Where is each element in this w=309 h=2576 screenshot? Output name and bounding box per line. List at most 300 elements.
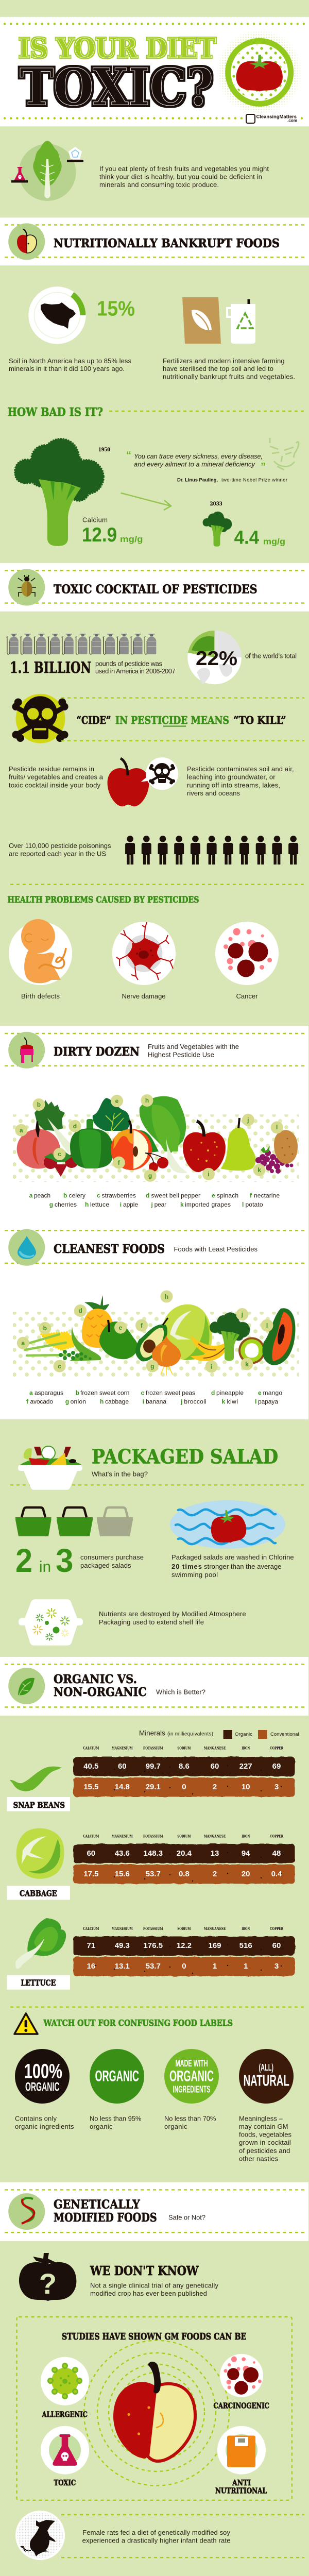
legend: cleanest foods: j bbox=[180, 1398, 182, 1405]
table: snap beans: COPPER bbox=[270, 1745, 283, 1751]
letter badges: b bbox=[37, 1101, 41, 1108]
stat: 2 in 3: 2 bbox=[15, 1542, 32, 1579]
title: is your diet: IS YOUR DIET bbox=[19, 33, 216, 64]
text: pesticide contaminates bbox=[187, 765, 294, 797]
table: lettuce: SODIUM bbox=[177, 1926, 191, 1931]
legend: cleanest foods: k bbox=[221, 1398, 226, 1405]
section header: cleanest foods bbox=[5, 1229, 304, 1266]
text: nutrients: Nutrients are destroyed by Modified Atmosphere bbox=[99, 1610, 246, 1618]
heading: cide means to kill: “TO KILL” bbox=[233, 714, 286, 726]
text: nutrients bbox=[99, 1610, 246, 1626]
table: cabbage: SODIUM bbox=[177, 1834, 191, 1838]
badge: made with organic ingredients: ORGANIC bbox=[169, 2068, 214, 2085]
title: toxic: TOXIC? bbox=[20, 58, 213, 117]
letter badges bbox=[17, 1290, 273, 1372]
table: lettuce: CALCIUM bbox=[83, 1926, 99, 1931]
heading: DIRTY DOZEN bbox=[54, 1044, 140, 1059]
badge: all natural bbox=[239, 2049, 294, 2104]
legend: minerals bbox=[139, 1729, 299, 1739]
logo: cleansingmatters: CleansingMatters bbox=[256, 114, 297, 120]
legend: dirty dozen: d bbox=[146, 1192, 149, 1199]
legend: minerals: Minerals bbox=[139, 1729, 165, 1737]
legend: dirty dozen: g bbox=[49, 1201, 53, 1208]
banana bbox=[191, 1335, 229, 1361]
legend: cleanest foods: pineapple bbox=[216, 1389, 244, 1396]
text: chlorine bbox=[171, 1553, 294, 1579]
label: ANTI bbox=[232, 2479, 251, 2487]
arrow bbox=[121, 493, 171, 510]
panel: birth defects bbox=[9, 919, 72, 1000]
table: cabbage: MANGANESE bbox=[204, 1834, 226, 1838]
icon: fertilizer bag and mug bbox=[182, 297, 255, 344]
subtitle: Safe or Not? bbox=[168, 2214, 205, 2222]
text: contains only bbox=[15, 2114, 74, 2130]
table: snap beans: 10 bbox=[242, 1783, 250, 1791]
peas bbox=[59, 1350, 92, 1361]
table: snap beans: 14.8 bbox=[115, 1783, 130, 1791]
label: 2033: 2033 bbox=[210, 501, 222, 507]
table: snap beans bbox=[73, 1745, 295, 1797]
legend: cleanest foods: banana bbox=[146, 1398, 166, 1405]
logo: cleansingmatters: .com bbox=[287, 118, 297, 123]
table: lettuce: 49.3 bbox=[115, 1941, 130, 1950]
heading: we don't know: WE DON'T KNOW bbox=[90, 2263, 199, 2278]
icon: cabbage bbox=[16, 1828, 64, 1879]
text: no less than 95: organic bbox=[90, 2123, 113, 2130]
icon: skull on yellow bbox=[12, 694, 68, 743]
label: cabbage bbox=[7, 1886, 70, 1900]
badge: 100 percent organic: 100% bbox=[24, 2060, 62, 2083]
table: cabbage: MAGNESIUM bbox=[112, 1834, 133, 1838]
heading: how bad is it: HOW BAD IS IT? bbox=[7, 406, 103, 419]
table: cabbage: 13 bbox=[211, 1849, 219, 1858]
letter badges bbox=[15, 1094, 283, 1182]
legend: dirty dozen: celery bbox=[69, 1192, 85, 1199]
table: cabbage: IRON bbox=[242, 1834, 250, 1838]
legend: cleanest foods: h bbox=[100, 1398, 104, 1405]
legend: cleanest foods: b bbox=[76, 1389, 79, 1396]
onion bbox=[152, 1335, 181, 1376]
stat: 1.1 billion bbox=[10, 659, 176, 677]
badge: made with organic ingredients bbox=[164, 2049, 219, 2104]
heading: studies: STUDIES HAVE SHOWN GM FOODS CAN BE bbox=[62, 2331, 246, 2342]
icon: snap bean bbox=[10, 1767, 62, 1791]
legend: dirty dozen: a bbox=[29, 1192, 33, 1199]
legend: dirty dozen: j bbox=[150, 1201, 153, 1208]
table: snap beans: 3 bbox=[274, 1783, 279, 1791]
legend: minerals: Conventional bbox=[270, 1732, 299, 1737]
grapes bbox=[255, 1146, 294, 1174]
icon: half gm apple bbox=[113, 2362, 195, 2461]
table: cabbage: 20 bbox=[242, 1870, 250, 1878]
text: fertilizers: have sterilised the top soil and led to bbox=[163, 365, 273, 372]
letter badges: f bbox=[118, 1159, 121, 1166]
subtitle bbox=[148, 1043, 239, 1058]
table: lettuce: 1 bbox=[244, 1962, 248, 1971]
table: lettuce bbox=[73, 1926, 295, 1976]
panel: nutritionally bankrupt foods bbox=[0, 217, 309, 266]
legend: cleanest foods: kiwi bbox=[227, 1398, 238, 1405]
text: meaningless: of pesticides and bbox=[239, 2147, 290, 2155]
text: meaningless: may contain GM bbox=[239, 2123, 288, 2130]
table: lettuce: 3 bbox=[274, 1962, 279, 1971]
table: snap beans: 0 bbox=[182, 1783, 186, 1791]
text: meaningless: foods, vegetables bbox=[239, 2131, 291, 2139]
label: Cancer bbox=[236, 992, 258, 1000]
legend: dirty dozen: peach bbox=[34, 1192, 50, 1199]
text: pesticide contaminates: Pesticide contaminates soil and air, bbox=[187, 765, 294, 773]
legend: dirty dozen: lettuce bbox=[90, 1201, 109, 1208]
broccoli bbox=[210, 1313, 250, 1361]
legend: dirty dozen: k bbox=[180, 1201, 184, 1208]
legend: cleanest foods: frozen sweet peas bbox=[146, 1389, 195, 1396]
heading: MODIFIED FOODS bbox=[54, 2210, 157, 2225]
table: snap beans: 40.5 bbox=[83, 1762, 98, 1771]
stat: calcium 2033 bbox=[234, 527, 285, 548]
text: intro: think your diet is healthy, but you could be deficient in bbox=[99, 173, 262, 180]
stat: 15 percent: 15% bbox=[97, 297, 135, 320]
table: lettuce: COPPER bbox=[270, 1926, 283, 1931]
text: meaningless bbox=[239, 2114, 291, 2162]
legend: dirty dozen: sweet bell pepper bbox=[151, 1192, 200, 1199]
legend: dirty dozen: f bbox=[250, 1192, 252, 1199]
text: pesticide residue: toxic cocktail inside your body bbox=[9, 781, 101, 789]
letter badges: i bbox=[211, 1363, 212, 1370]
text: soil minerals bbox=[9, 357, 132, 372]
table: snap beans: 69 bbox=[272, 1762, 281, 1771]
label: snap beans: SNAP BEANS bbox=[13, 1800, 65, 1810]
logo: cleansingmatters bbox=[246, 114, 297, 123]
heading: TOXIC COCKTAIL OF PESTICIDES bbox=[54, 582, 258, 596]
text: no less than 95 bbox=[90, 2114, 142, 2130]
quote: linus pauling: “ bbox=[126, 450, 131, 461]
legend: cleanest foods: onion bbox=[71, 1398, 86, 1405]
table: lettuce: 0 bbox=[182, 1962, 186, 1971]
heading: cide means to kill bbox=[76, 714, 286, 726]
corn bbox=[41, 1327, 101, 1361]
table: cabbage: 2 bbox=[213, 1870, 217, 1878]
table: lettuce: 169 bbox=[208, 1941, 221, 1950]
subtitle: What's in the bag? bbox=[92, 1470, 148, 1478]
bell pepper bbox=[70, 1119, 113, 1168]
stat: calcium 2033: mg/g bbox=[263, 537, 285, 547]
letter badges: k bbox=[245, 1361, 249, 1368]
legend: cleanest foods: cabbage bbox=[105, 1398, 129, 1405]
letter badges: h bbox=[145, 1097, 149, 1104]
label: CARCINOGENIC bbox=[213, 2402, 269, 2410]
letter badges: g bbox=[150, 1363, 154, 1370]
badge: organic: ORGANIC bbox=[95, 2068, 139, 2085]
text: pesticide contaminates: running off into streams, lakes, bbox=[187, 781, 280, 789]
label: NUTRITIONAL bbox=[215, 2486, 267, 2495]
icon: carcinogenic bbox=[213, 2354, 269, 2410]
cabbage bbox=[162, 1304, 212, 1360]
text: contains only: organic ingredients bbox=[15, 2123, 74, 2130]
label: snap beans bbox=[7, 1797, 70, 1811]
text: no less than 95: No less than 95% bbox=[90, 2114, 142, 2123]
text: poisonings bbox=[9, 842, 111, 857]
letter badges: c bbox=[58, 1150, 61, 1158]
stat: 2 in 3: packaged salads bbox=[80, 1562, 131, 1569]
icon: pauling face bbox=[270, 438, 299, 470]
text: female rats: Female rats fed a diet of genetically modified soy bbox=[82, 2529, 231, 2536]
text: contains only: Contains only bbox=[15, 2114, 57, 2123]
legend: dirty dozen: l bbox=[242, 1201, 244, 1208]
legend: minerals: (in milliequivalents) bbox=[167, 1731, 213, 1737]
subtitle: Foods with Least Pesticides bbox=[174, 1245, 258, 1253]
panel: cancer bbox=[215, 922, 279, 1000]
text: meaningless: grown in cocktail bbox=[239, 2139, 291, 2146]
heading: confusing food labels: WATCH OUT FOR CONFUSING FOOD LABELS bbox=[43, 2019, 233, 2029]
icon: small broccoli 2033 bbox=[203, 512, 232, 547]
text: pesticide residue: Pesticide residue remains in bbox=[9, 765, 94, 773]
legend: dirty dozen: nectarine bbox=[254, 1192, 280, 1199]
quote: linus pauling: Dr. Linus Pauling, bbox=[177, 478, 218, 483]
heading bbox=[54, 2197, 157, 2225]
table: cabbage: 94 bbox=[242, 1849, 250, 1858]
letter badges: l bbox=[266, 1322, 268, 1329]
text: clinical trial: modified crop has ever been published bbox=[90, 2290, 207, 2297]
heading: packaged salad: PACKAGED SALAD bbox=[92, 1445, 278, 1468]
legend: dirty dozen: e bbox=[212, 1192, 215, 1199]
table: cabbage: 0.4 bbox=[271, 1870, 282, 1878]
apple bbox=[183, 1121, 226, 1172]
text: pesticide residue bbox=[9, 765, 104, 789]
letter badges: f bbox=[141, 1322, 143, 1329]
icon: anti nutritional scale bbox=[215, 2426, 267, 2495]
icon: tomato in ring bbox=[216, 29, 303, 115]
papaya bbox=[262, 1308, 295, 1365]
stat: 2 in 3: in bbox=[39, 1558, 51, 1575]
table: lettuce: 53.7 bbox=[146, 1962, 161, 1971]
quote: linus pauling bbox=[126, 450, 287, 483]
heading: cide means to kill: “CIDE” bbox=[76, 714, 111, 726]
heading: cide means to kill: IN PESTICIDE MEANS bbox=[115, 714, 229, 726]
icon: beetle bbox=[8, 569, 45, 606]
legend: cleanest foods: l bbox=[255, 1398, 256, 1405]
text: intro bbox=[99, 165, 269, 189]
stat: calcium 1950 bbox=[82, 516, 143, 546]
text: intro: minerals and consuming toxic produce. bbox=[99, 181, 219, 189]
quote: linus pauling: ” bbox=[261, 461, 266, 472]
table: snap beans: 227 bbox=[239, 1762, 252, 1771]
heading: NON-ORGANIC bbox=[54, 1685, 147, 1699]
text: pesticide contaminates: rivers and oceans bbox=[187, 789, 240, 797]
label: ALLERGENIC bbox=[42, 2410, 88, 2419]
icon row: baskets 2 of 3 bbox=[15, 1507, 133, 1536]
label: cabbage: CABBAGE bbox=[20, 1888, 57, 1898]
table: cabbage: COPPER bbox=[270, 1834, 283, 1838]
table: cabbage: POTASSIUM bbox=[143, 1834, 163, 1838]
legend: dirty dozen: i bbox=[120, 1201, 122, 1208]
heading: health problems: HEALTH PROBLEMS CAUSED BY PESTICIDES bbox=[7, 895, 199, 905]
text: meaningless: other nasties bbox=[239, 2155, 278, 2162]
icon: rat bbox=[15, 2511, 65, 2560]
badge: made with organic ingredients: INGREDIENTS bbox=[173, 2084, 210, 2095]
letter badges: d bbox=[73, 1123, 77, 1130]
stat: calcium 2033: 4.4 bbox=[234, 527, 259, 548]
icon: leaf bbox=[8, 1668, 45, 1704]
table: snap beans: POTASSIUM bbox=[143, 1745, 163, 1751]
text: soil minerals: minerals in it than it did 100 years ago. bbox=[9, 365, 125, 372]
table: snap beans: 2 bbox=[213, 1783, 217, 1791]
icon: black tomato question bbox=[19, 2253, 76, 2301]
table: lettuce: MANGANESE bbox=[204, 1926, 226, 1931]
icon: lettuce bbox=[15, 1918, 66, 1969]
text: pesticide residue: fruits/ vegetables and creates a bbox=[9, 773, 104, 781]
legend: dirty dozen: cherries bbox=[55, 1201, 77, 1208]
badge: 100 percent organic: ORGANIC bbox=[25, 2080, 60, 2094]
table: lettuce: 516 bbox=[239, 1941, 252, 1950]
letter badges: d bbox=[78, 1307, 82, 1314]
table: snap beans: 8.6 bbox=[179, 1762, 190, 1771]
legend: cleanest foods: papaya bbox=[258, 1398, 278, 1405]
panel: nerve damage bbox=[112, 922, 176, 1000]
label: Nerve damage bbox=[122, 992, 166, 1000]
letter badges: c bbox=[58, 1363, 61, 1370]
legend: cleanest foods: c bbox=[141, 1389, 145, 1396]
table: lettuce: 16 bbox=[87, 1962, 95, 1971]
table: cabbage: 17.5 bbox=[83, 1870, 98, 1878]
text: fertilizers: nutritionally bankrupt fruits and vegetables. bbox=[163, 373, 295, 381]
letter badges: a bbox=[20, 1127, 23, 1134]
icon: dna bbox=[8, 2193, 45, 2230]
legend: cleanest foods: avocado bbox=[30, 1398, 53, 1405]
text: world total: of the world's total bbox=[245, 652, 297, 659]
legend: cleanest foods: i bbox=[143, 1398, 144, 1405]
chart: globe 22 percent bbox=[187, 631, 242, 685]
cherries bbox=[145, 1153, 168, 1172]
table: cabbage: 15.6 bbox=[115, 1870, 130, 1878]
heading: GENETICALLY bbox=[54, 2197, 141, 2211]
legend: cleanest foods: g bbox=[65, 1398, 69, 1405]
table: lettuce: MAGNESIUM bbox=[112, 1926, 133, 1931]
table: cabbage: 53.7 bbox=[146, 1870, 161, 1878]
text: poisonings: are reported each year in the US bbox=[9, 850, 106, 857]
stat: 1.1 billion: pounds of pesticide was bbox=[95, 659, 163, 668]
table: lettuce: IRON bbox=[242, 1926, 250, 1931]
panel: white produce section bbox=[0, 1026, 308, 1419]
letter badges: h bbox=[165, 1293, 168, 1300]
stat: 1.1 billion: 1.1 BILLION bbox=[10, 659, 91, 677]
table: snap beans: 60 bbox=[211, 1762, 219, 1771]
illustration: cleanest foods bbox=[13, 1290, 299, 1379]
nectarine bbox=[111, 1121, 152, 1170]
letter badges: g bbox=[148, 1172, 152, 1179]
stat: 1.1 billion: used in America in 2006-2007 bbox=[95, 667, 176, 675]
potato bbox=[274, 1130, 298, 1164]
letter badges: e bbox=[119, 1324, 123, 1331]
table: lettuce: 60 bbox=[272, 1941, 281, 1950]
spinach bbox=[93, 1098, 130, 1131]
legend: dirty dozen: b bbox=[63, 1192, 67, 1199]
table: snap beans: MAGNESIUM bbox=[112, 1745, 133, 1751]
letter badges: b bbox=[43, 1325, 47, 1332]
table: lettuce: POTASSIUM bbox=[143, 1926, 163, 1931]
stat: 2 in 3 bbox=[15, 1542, 144, 1579]
asparagus bbox=[24, 1334, 66, 1355]
icon: lettuce on scales bbox=[11, 141, 83, 201]
avocado bbox=[135, 1318, 168, 1361]
legend: dirty dozen: potato bbox=[245, 1201, 263, 1208]
table: snap beans: 99.7 bbox=[146, 1762, 161, 1771]
legend: dirty dozen: h bbox=[85, 1201, 89, 1208]
text: meaningless: Meaningless – bbox=[239, 2114, 283, 2123]
letter badges: a bbox=[21, 1340, 25, 1347]
subtitle: Which is Better? bbox=[156, 1688, 205, 1696]
quote: linus pauling: You can trace every sickness, every disease, bbox=[134, 452, 263, 460]
label: lettuce bbox=[7, 1975, 70, 1990]
quote: linus pauling: two-time Nobel Prize winner bbox=[221, 478, 287, 483]
icon: toxic bbox=[41, 2426, 89, 2487]
celery bbox=[35, 1100, 71, 1154]
text: clinical trial bbox=[90, 2281, 218, 2297]
legend: dirty dozen: spinach bbox=[217, 1192, 238, 1199]
legend: cleanest foods bbox=[26, 1389, 282, 1405]
badge: organic bbox=[90, 2049, 144, 2104]
letter badges: j bbox=[247, 1116, 249, 1124]
legend: cleanest foods: d bbox=[211, 1389, 215, 1396]
text: clinical trial: Not a single clinical trial of any genetically bbox=[90, 2281, 218, 2289]
legend: dirty dozen: pear bbox=[154, 1201, 166, 1208]
table: cabbage: 43.6 bbox=[115, 1849, 130, 1858]
legend: minerals: Organic bbox=[235, 1732, 252, 1737]
icon: dripping apple bbox=[8, 1032, 45, 1069]
legend: cleanest foods: a bbox=[29, 1389, 33, 1396]
text: chlorine: swimming pool bbox=[171, 1571, 218, 1579]
stat: 2 in 3: consumers purchase bbox=[80, 1553, 144, 1561]
table: lettuce: 176.5 bbox=[144, 1941, 163, 1950]
table: cabbage: 48 bbox=[272, 1849, 281, 1858]
illustration: dirty dozen produce bbox=[13, 1094, 299, 1182]
label: 1950: 1950 bbox=[98, 447, 110, 453]
table: cabbage: 0.8 bbox=[179, 1870, 190, 1878]
legend: cleanest foods: mango bbox=[263, 1389, 282, 1396]
text: fertilizers: Fertilizers and modern intensive farming bbox=[163, 357, 285, 365]
pineapple bbox=[82, 1295, 114, 1348]
letter badges: k bbox=[258, 1166, 261, 1174]
table: cabbage: 148.3 bbox=[144, 1849, 163, 1858]
heading: CLEANEST FOODS bbox=[54, 1242, 165, 1256]
letter badges: e bbox=[115, 1097, 119, 1105]
icon row: people bbox=[125, 836, 298, 865]
table: lettuce: 13.1 bbox=[115, 1962, 130, 1971]
icon: tomato in chlorine water bbox=[170, 1500, 285, 1549]
text: intro: If you eat plenty of fresh fruits and vegetables you might bbox=[99, 165, 269, 173]
label bbox=[215, 2479, 267, 2495]
text: nutrients: Packaging used to extend shelf life bbox=[99, 1618, 204, 1626]
text: no less than 70 bbox=[164, 2114, 216, 2130]
table: cabbage: 60 bbox=[87, 1849, 95, 1858]
icon: modified atmosphere package bbox=[19, 1599, 83, 1646]
letter badges: j bbox=[241, 1311, 243, 1318]
legend: dirty dozen bbox=[29, 1192, 280, 1208]
heading: ORGANIC VS. bbox=[54, 1672, 137, 1686]
legend: cleanest foods: f bbox=[26, 1398, 29, 1405]
icon: apple with skull bubble bbox=[108, 757, 178, 806]
panel: title header bbox=[0, 16, 309, 127]
text: no less than 70: organic bbox=[164, 2123, 187, 2130]
kiwi bbox=[238, 1337, 265, 1364]
table: cabbage: CALCIUM bbox=[83, 1834, 99, 1838]
table: snap beans: 29.1 bbox=[146, 1783, 161, 1791]
icon: allergenic bbox=[41, 2357, 89, 2419]
panel: organic vs non-organic bbox=[0, 1657, 308, 1716]
legend: cleanest foods: asparagus bbox=[35, 1389, 63, 1396]
text: female rats bbox=[82, 2529, 231, 2545]
panel: genetically modified foods bbox=[0, 2182, 308, 2241]
table: snap beans: CALCIUM bbox=[83, 1745, 99, 1751]
